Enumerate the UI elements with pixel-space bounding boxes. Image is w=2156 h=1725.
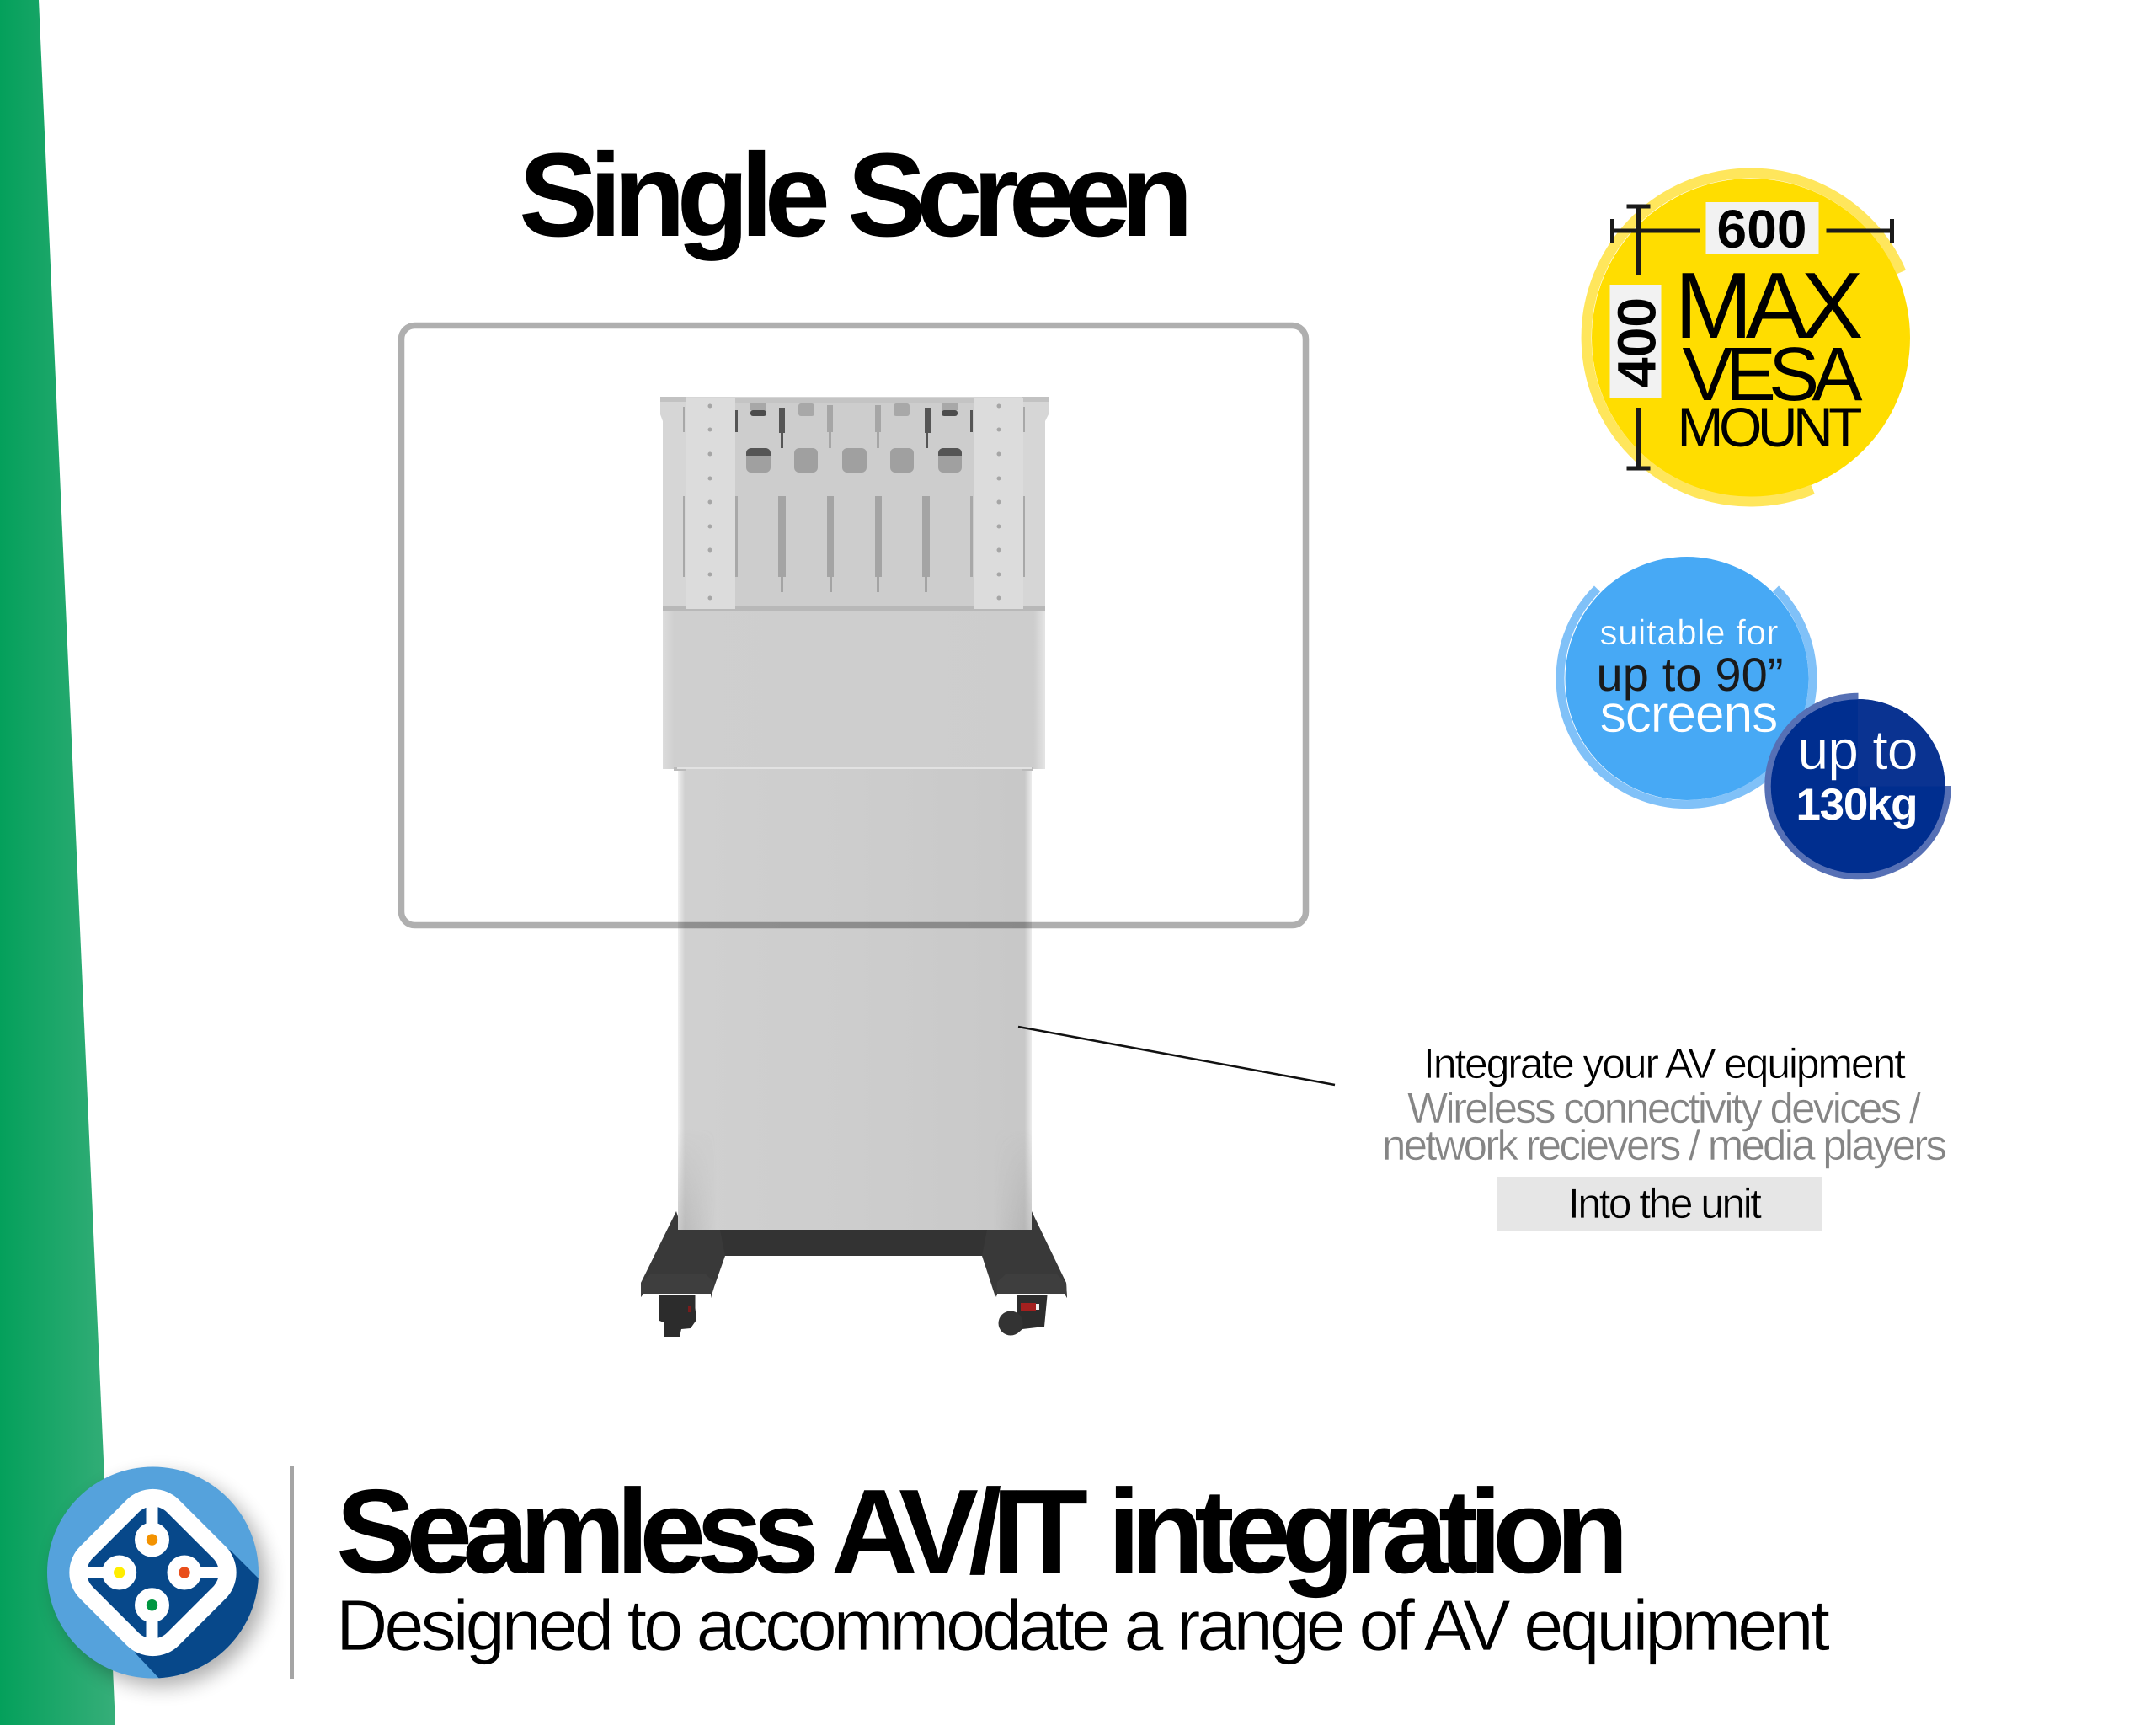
badge: up to 130kg: 130kg [1796, 780, 1919, 830]
square cut-outs [746, 448, 962, 473]
stand base with feet [641, 1211, 1067, 1298]
VESA mounting bracket [660, 397, 1049, 611]
footer divider [290, 1466, 294, 1679]
height dimension line [1627, 206, 1651, 468]
badge: max VESA mount [1587, 174, 1910, 502]
badge text: MOUNT [1678, 396, 1863, 458]
footer heading: Seamless [336, 1465, 819, 1599]
400 label: 400 [1607, 297, 1668, 387]
rail thin lines [683, 407, 1025, 577]
badge: up to 130kg [1768, 696, 1948, 876]
footer subheading: Designed to accommodate a range of AV equipment [336, 1586, 1830, 1666]
rail holes [707, 404, 1001, 600]
green side band [0, 0, 115, 1725]
side rails [686, 398, 735, 609]
column [678, 762, 1032, 1230]
lower slots [778, 496, 930, 592]
callout leader line [1018, 1027, 1335, 1085]
badge text [1674, 254, 1863, 458]
callout: integrate AV equipment: Integrate your AV equipment [1423, 1040, 1906, 1087]
top tabs [750, 403, 958, 416]
badge: suitable for up to 90 inch screens: screens [1600, 685, 1779, 744]
badge text: MAX [1674, 254, 1863, 358]
footer heading: integration [1107, 1465, 1629, 1599]
middle housing [663, 611, 1045, 771]
icon: AV/IT integration logo [45, 1464, 278, 1698]
left caster [659, 1295, 696, 1337]
yellow circle [1592, 179, 1910, 497]
upper slots [827, 405, 881, 448]
title: Single Screen: Screen [847, 128, 1193, 261]
callout: integrate AV equipment: network recievers / media players [1382, 1121, 1947, 1169]
footer heading: AV/IT [831, 1465, 1088, 1599]
badge: suitable for up to 90 inch screens: suitable for [1600, 612, 1779, 652]
badge: up to 130kg: up to [1797, 718, 1919, 781]
badge: suitable for up to 90 inch screens: up to 90” [1597, 648, 1784, 701]
into the unit tag: Into the unit [1568, 1180, 1762, 1227]
badge text: VESA [1683, 333, 1863, 417]
right caster [999, 1295, 1048, 1336]
title: Single Screen [519, 128, 1193, 261]
callout: integrate AV equipment: Wireless connectivity devices / [1407, 1084, 1922, 1132]
600 label: 600 [1716, 199, 1807, 259]
width dimension line [1612, 219, 1892, 243]
badge: suitable for up to 90 inch screens [1560, 557, 1813, 804]
title: Single Screen: Single [519, 128, 830, 261]
product: mobile stand [641, 397, 1067, 1337]
into the unit tag [1497, 1177, 1822, 1231]
footer heading [336, 1465, 1629, 1599]
screen outline frame [401, 325, 1305, 925]
callout: integrate AV equipment [1382, 1040, 1947, 1231]
